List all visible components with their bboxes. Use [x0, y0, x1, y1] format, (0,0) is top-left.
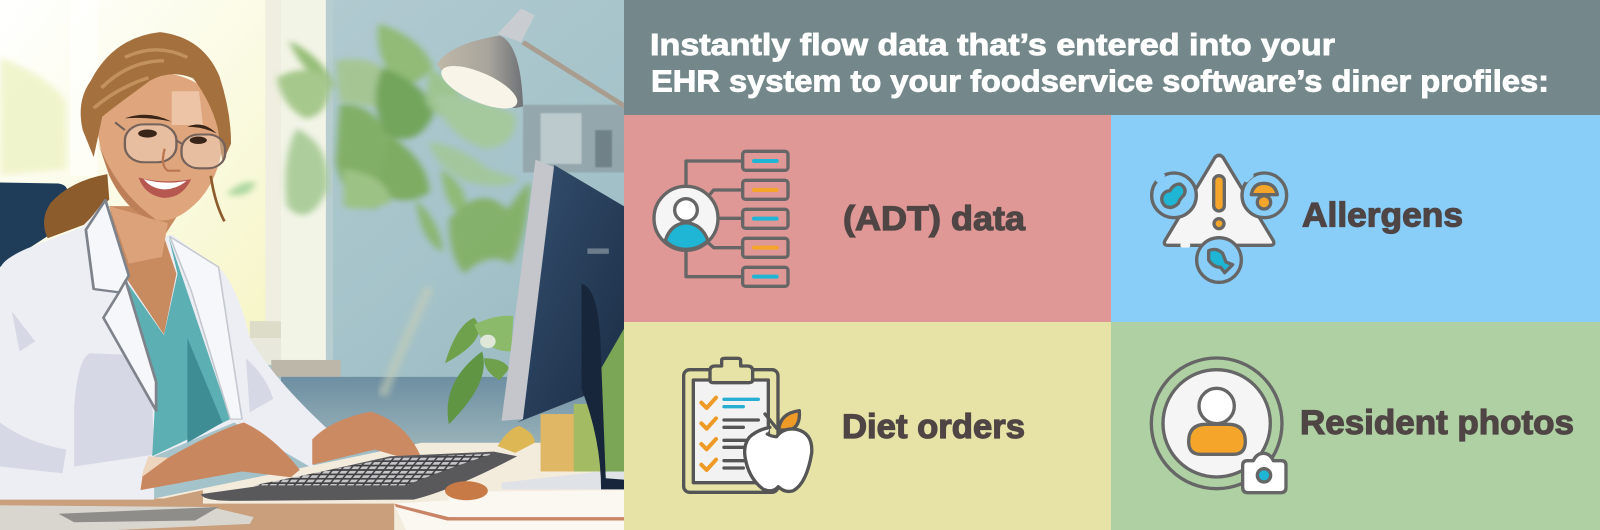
- cuff and hands: [141, 456, 174, 480]
- icon: resident portrait with camera: [1151, 358, 1286, 493]
- lower wall: [281, 377, 628, 451]
- icon: patient data tree: [654, 151, 788, 286]
- box behind monitor: [541, 414, 576, 472]
- window: [0, 0, 341, 377]
- eyes and brows: [125, 115, 217, 144]
- monitor: [502, 160, 554, 421]
- title: EHR system to your foodservice software’s diner profiles:: [651, 64, 1549, 98]
- monitor base: [502, 472, 628, 489]
- coat shading: [0, 311, 273, 473]
- face: [96, 73, 223, 221]
- scrubs: [126, 237, 230, 456]
- panel: Allergens: [1111, 115, 1600, 322]
- hair: [81, 32, 231, 162]
- label: Allergens: [1302, 196, 1463, 234]
- label: Diet orders: [842, 408, 1025, 446]
- chair: [0, 183, 67, 267]
- panel: ADT data: [624, 115, 1111, 322]
- desk: [0, 443, 628, 530]
- monitor stand: [582, 284, 628, 489]
- smile: [139, 177, 191, 198]
- label: Resident photos: [1300, 404, 1574, 442]
- chest: [109, 206, 183, 335]
- front plant: [445, 316, 513, 424]
- background plant: [226, 24, 531, 274]
- icon: allergen warning triangle: [1152, 155, 1287, 282]
- panel: Diet orders: [624, 322, 1111, 530]
- orange object: [445, 481, 488, 500]
- wall picture: [523, 105, 628, 172]
- white lab coat: [0, 199, 328, 500]
- illustration: doctor at a computer desk: [0, 0, 628, 530]
- notebook: [394, 490, 628, 530]
- papers: [0, 505, 254, 530]
- keyboard: [201, 452, 517, 501]
- icon: clipboard and apple: [684, 358, 812, 492]
- lamp: [434, 8, 628, 117]
- coat lapels: [86, 200, 242, 419]
- title: Instantly flow data that’s entered into your: [650, 27, 1335, 62]
- ponytail: [44, 174, 109, 238]
- label: (ADT) data: [843, 200, 1026, 238]
- title: [650, 27, 1549, 98]
- header band: [624, 0, 1600, 115]
- panel: Resident photos: [1111, 322, 1600, 530]
- glasses: [115, 122, 225, 168]
